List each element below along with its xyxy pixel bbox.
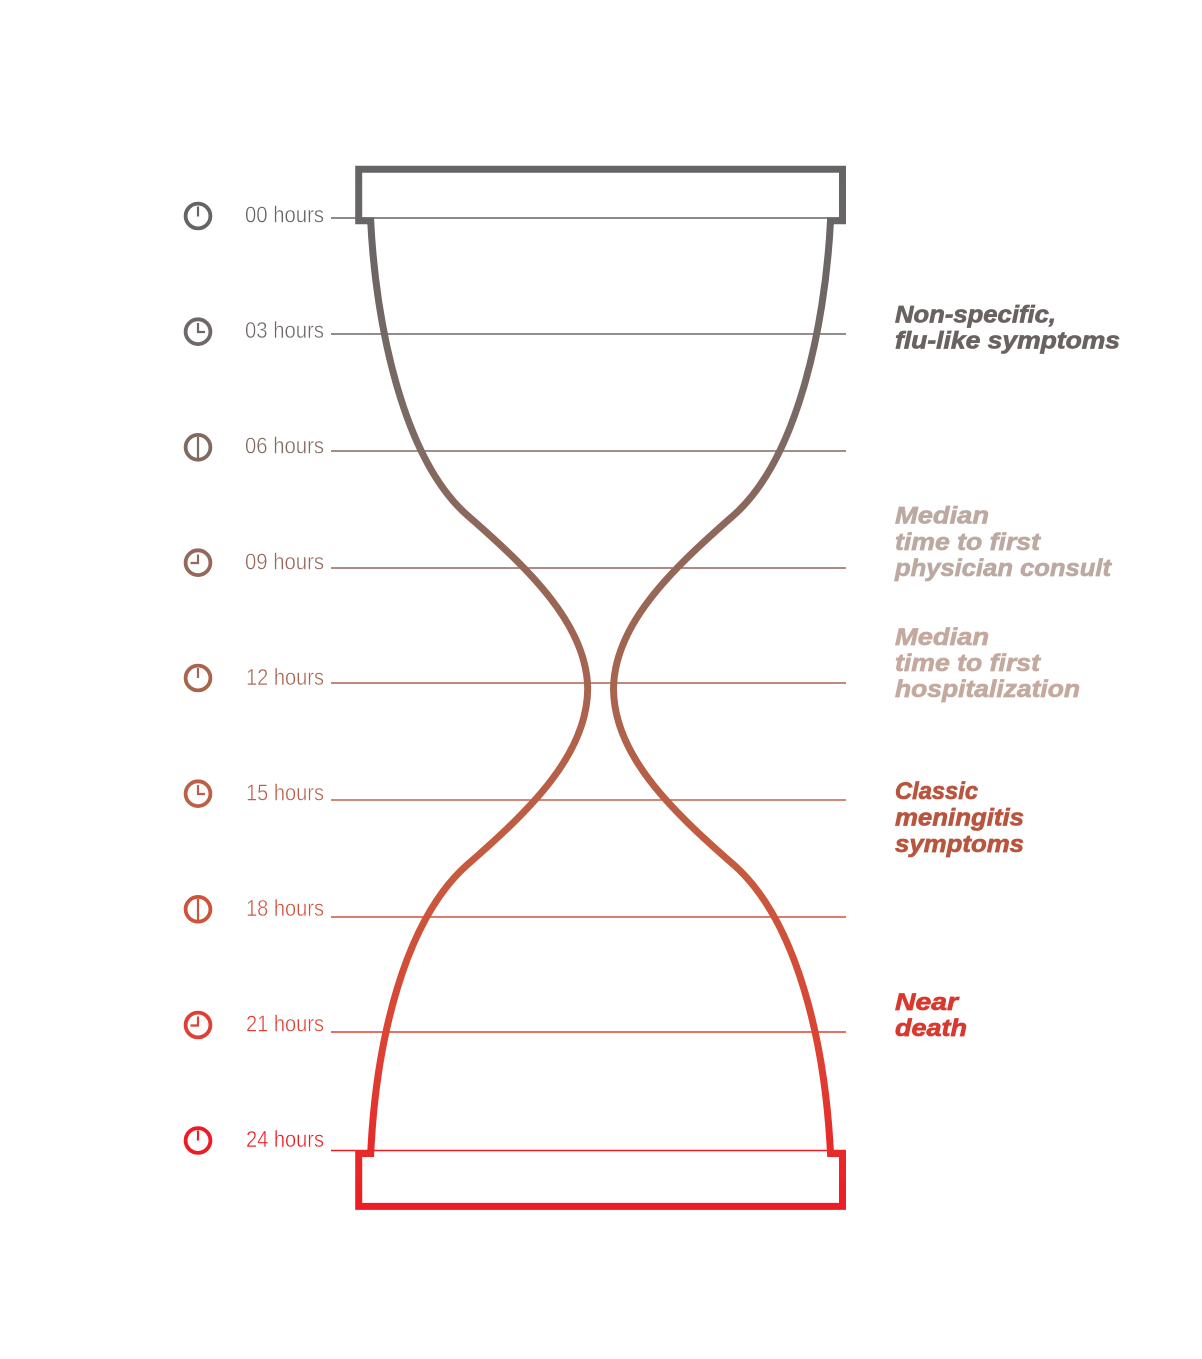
icon: clock 15 hours xyxy=(186,781,210,806)
stage: classic meningitis symptoms: meningitis xyxy=(895,804,1024,832)
label: 15 hours: 15 hours xyxy=(246,780,324,806)
stage labels xyxy=(894,302,1120,1042)
label: 06 hours: 06 hours xyxy=(245,433,324,459)
stage: non-specific symptoms xyxy=(895,302,1120,354)
icon: clock 18 hours xyxy=(186,897,210,922)
stage: near death: Near xyxy=(895,989,960,1016)
stage: first hospitalization: hospitalization xyxy=(895,676,1080,703)
stage: non-specific symptoms: flu-like symptoms xyxy=(895,328,1120,354)
stage: classic meningitis symptoms xyxy=(895,778,1024,858)
stage: non-specific symptoms: Non-specific, xyxy=(895,302,1056,328)
label: 03 hours: 03 hours xyxy=(245,317,324,343)
stage: first hospitalization: Median xyxy=(895,624,989,651)
stage: classic meningitis symptoms: symptoms xyxy=(895,831,1024,858)
icon: clock 21 hours xyxy=(186,1013,210,1037)
label: 09 hours: 09 hours xyxy=(245,548,324,574)
icon: clock 12 hours xyxy=(186,666,210,690)
stage: first physician consult xyxy=(894,502,1112,582)
label: 12 hours: 12 hours xyxy=(246,664,324,690)
hourglass outline xyxy=(359,169,842,1206)
hour grid lines xyxy=(331,218,846,1150)
stage: classic meningitis symptoms: Classic xyxy=(895,778,978,805)
label: 00 hours: 00 hours xyxy=(245,202,324,228)
stage: near death xyxy=(895,989,967,1042)
stage: near death: death xyxy=(895,1015,967,1042)
icon: clock 24 hours xyxy=(186,1128,210,1153)
stage: first hospitalization xyxy=(895,624,1080,703)
hour labels xyxy=(245,202,324,1152)
label: 24 hours: 24 hours xyxy=(246,1126,324,1152)
icon: clock 03 hours xyxy=(186,319,210,344)
stage: first physician consult: physician consult xyxy=(894,555,1112,582)
clock icons xyxy=(186,204,210,1153)
icon: clock 06 hours xyxy=(186,435,210,460)
stage: first physician consult: time to first xyxy=(895,529,1041,556)
stage: first hospitalization: time to first xyxy=(895,650,1041,677)
label: 21 hours: 21 hours xyxy=(246,1011,324,1037)
stage: first physician consult: Median xyxy=(895,502,989,530)
icon: clock 00 hours xyxy=(186,204,210,228)
label: 18 hours: 18 hours xyxy=(246,895,324,921)
icon: clock 09 hours xyxy=(186,550,210,575)
